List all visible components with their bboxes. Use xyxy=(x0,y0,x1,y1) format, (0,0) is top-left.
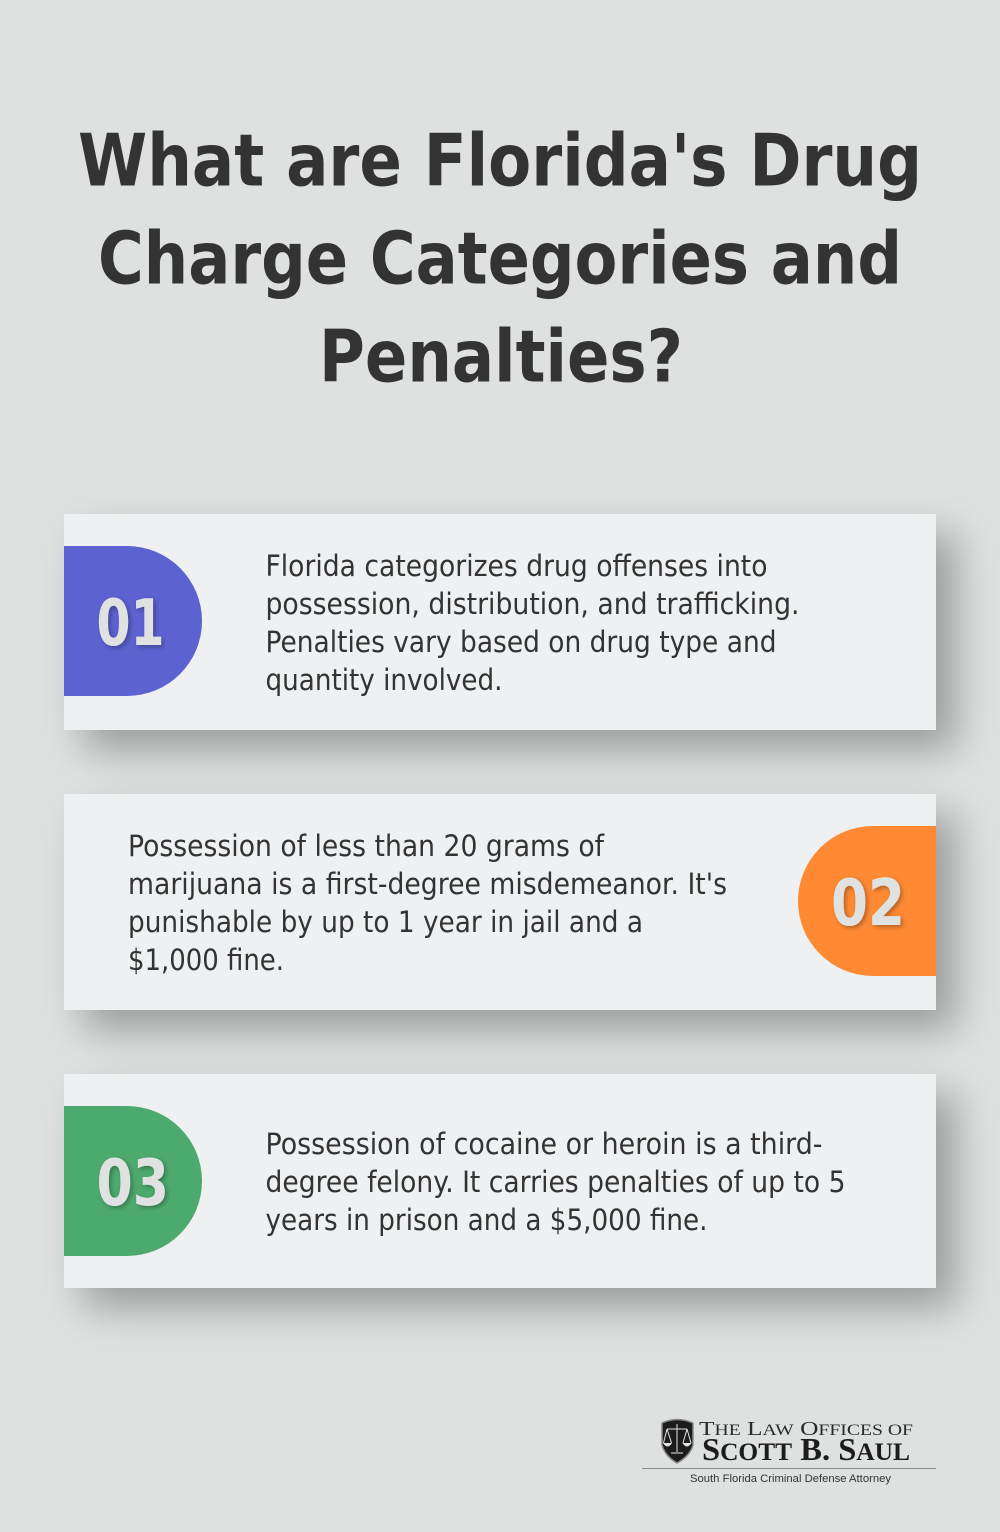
title xyxy=(78,118,922,398)
text block: card 02 xyxy=(128,829,727,977)
text block: card 02: punishable by up to 1 year in jail and a xyxy=(128,905,643,939)
badge: 03 xyxy=(64,1106,202,1256)
text block: card 03: degree felony. It carries penalties of up to 5 xyxy=(266,1165,846,1199)
logo xyxy=(642,1418,936,1485)
text block: card 02: Possession of less than 20 grams of xyxy=(128,829,605,863)
panel: card 02 xyxy=(64,794,956,1030)
logo wordmark: SCOTT B. SAUL xyxy=(702,1431,910,1467)
logo tagline: South Florida Criminal Defense Attorney xyxy=(690,1473,892,1485)
icon: scales of justice shield xyxy=(662,1420,693,1463)
badge: 02 xyxy=(798,826,936,976)
text block: card 02: marijuana is a first-degree misdemeanor. It's xyxy=(128,867,727,901)
text block: card 01: Penalties vary based on drug type and xyxy=(266,625,776,659)
text block: card 01: quantity involved. xyxy=(266,663,502,697)
badge: 02: 02 xyxy=(831,867,905,941)
badge: 01 xyxy=(64,546,202,696)
text block: card 01: possession, distribution, and trafficking. xyxy=(266,587,800,621)
title: Penalties? xyxy=(319,314,683,398)
text block: card 01: Florida categorizes drug offenses into xyxy=(266,549,768,583)
title: Charge Categories and xyxy=(98,216,902,300)
text block: card 02: $1,000 fine. xyxy=(128,943,284,977)
panel: card 01 xyxy=(64,514,956,750)
panel: card 03 xyxy=(64,1074,956,1308)
badge: 03: 03 xyxy=(96,1147,169,1221)
text block: card 03: Possession of cocaine or heroin is a third- xyxy=(266,1127,822,1161)
badge: 01: 01 xyxy=(96,587,164,661)
logo wordmark: THE L AW O FFICES OF xyxy=(699,1418,913,1440)
text block: card 03: years in prison and a $5,000 fine. xyxy=(266,1203,708,1237)
text block: card 01 xyxy=(266,549,800,697)
text block: card 03 xyxy=(266,1127,846,1237)
